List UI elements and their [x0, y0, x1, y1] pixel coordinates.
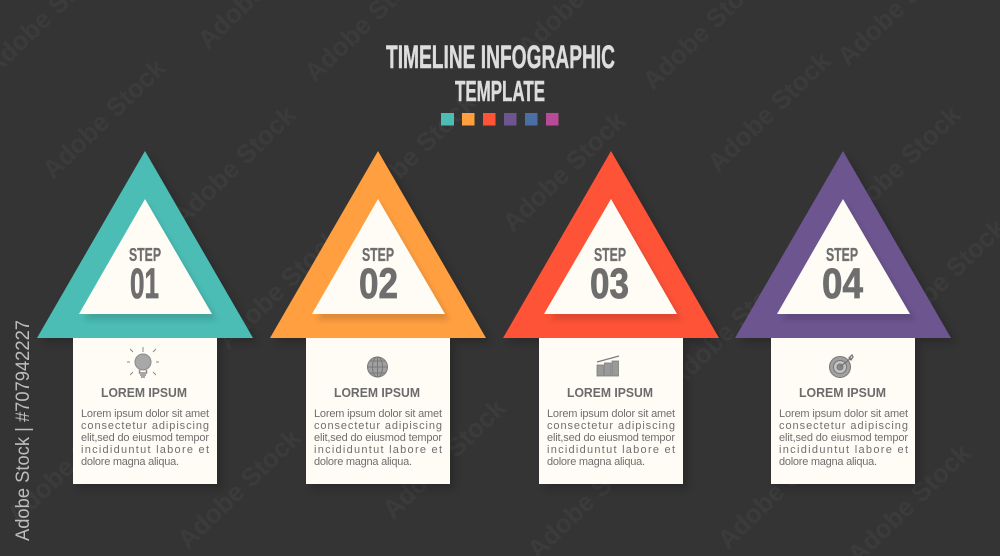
description card 02: [306, 338, 450, 484]
inner triangle shadow 01: [84, 203, 217, 320]
inner triangle shadow 04: [782, 203, 915, 320]
step label 02: STEP: [362, 245, 394, 265]
panel: step 01: [37, 151, 258, 489]
panel: step 02: [270, 151, 491, 489]
card body text 04: dolore magna aliqua.: [779, 456, 877, 468]
card body text 01: dolore magna aliqua.: [81, 456, 179, 468]
title: [386, 39, 615, 108]
card body text 03: consectetur adipiscing: [547, 420, 675, 432]
outer triangle 04: [735, 151, 951, 338]
panel: step 04: [735, 151, 956, 489]
description card 03: [539, 338, 683, 484]
card body text 04: [779, 408, 908, 468]
outer triangle 02: [270, 151, 486, 338]
card body text 03: dolore magna aliqua.: [547, 456, 645, 468]
icon: globe: [368, 357, 388, 377]
card body text 03: Lorem ipsum dolor sit amet: [547, 408, 675, 420]
card body text 02: elit,sed do eiusmod tempor: [314, 432, 442, 444]
outer triangle 01: [37, 151, 253, 338]
watermark pattern on background: Adobe Stock: [1, 397, 137, 530]
icon: bar chart: [597, 356, 619, 376]
card body text 01: consectetur adipiscing: [81, 420, 209, 432]
card heading 01: LOREM IPSUM: [101, 385, 187, 400]
inner triangle shadow 02: [317, 203, 450, 320]
card body text 02: [314, 408, 442, 468]
watermark pattern on background: Adobe Stock: [711, 422, 847, 555]
card body text 02: incididuntut labore et: [314, 444, 442, 456]
card body text 03: incididuntut labore et: [547, 444, 675, 456]
card body text 04: elit,sed do eiusmod tempor: [779, 432, 908, 444]
card body text 02: Lorem ipsum dolor sit amet: [314, 408, 442, 420]
step label 04: STEP: [826, 245, 858, 265]
card heading 03: LOREM IPSUM: [567, 385, 653, 400]
step label 01: STEP: [129, 245, 161, 265]
description card 04: [771, 338, 915, 484]
inner triangle 04: [777, 199, 910, 314]
watermark pattern on background: Adobe Stock: [211, 222, 347, 355]
card body text 04: incididuntut labore et: [779, 444, 908, 456]
card heading 02: LOREM IPSUM: [334, 385, 420, 400]
icon: target: [830, 355, 853, 378]
inner triangle 02: [312, 199, 445, 314]
watermark pattern on background: Adobe Stock: [36, 52, 172, 185]
step number 02: 02: [359, 260, 398, 308]
card body text 01: elit,sed do eiusmod tempor: [81, 432, 209, 444]
title: TEMPLATE: [455, 76, 545, 108]
card body text 04: Lorem ipsum dolor sit amet: [779, 408, 908, 420]
step number 03: 03: [590, 260, 629, 308]
watermark pattern on background: Adobe Stock: [346, 87, 482, 220]
card body text 03: elit,sed do eiusmod tempor: [547, 432, 675, 444]
card body text 01: Lorem ipsum dolor sit amet: [81, 408, 209, 420]
watermark pattern on background: Adobe Stock: [831, 99, 967, 232]
card body text 04: consectetur adipiscing: [779, 420, 908, 432]
watermark pattern on background: Adobe Stock: [701, 45, 837, 178]
card body text 02: dolore magna aliqua.: [314, 456, 412, 468]
card body text 01: incididuntut labore et: [81, 444, 209, 456]
step number 01: 01: [130, 260, 159, 308]
card body text 03: [547, 408, 675, 468]
watermark pattern on background: Adobe Stock: [496, 105, 632, 238]
watermark pattern on background: Adobe Stock: [376, 392, 512, 525]
vertical stock id label: Adobe Stock | #707942227: [13, 320, 34, 541]
card body text 02: consectetur adipiscing: [314, 420, 442, 432]
watermark pattern on background: Adobe Stock: [171, 422, 307, 555]
outer triangle 03: [503, 151, 719, 338]
watermark pattern on background: Adobe Stock: [166, 99, 302, 232]
inner triangle shadow 03: [550, 203, 682, 320]
panel: step 03: [503, 151, 724, 489]
inner triangle 03: [544, 199, 677, 314]
step number 04: 04: [822, 260, 863, 308]
icon: light bulb: [127, 347, 159, 377]
inner triangle 01: [79, 199, 212, 314]
title: TIMELINE INFOGRAPHIC: [386, 39, 615, 75]
watermark pattern on background: Adobe Stock: [661, 262, 797, 395]
card body text 01: [81, 408, 209, 468]
colour legend squares: [441, 113, 558, 126]
step label 03: STEP: [594, 245, 626, 265]
description card 01: [73, 338, 217, 484]
card heading 04: LOREM IPSUM: [799, 385, 886, 400]
